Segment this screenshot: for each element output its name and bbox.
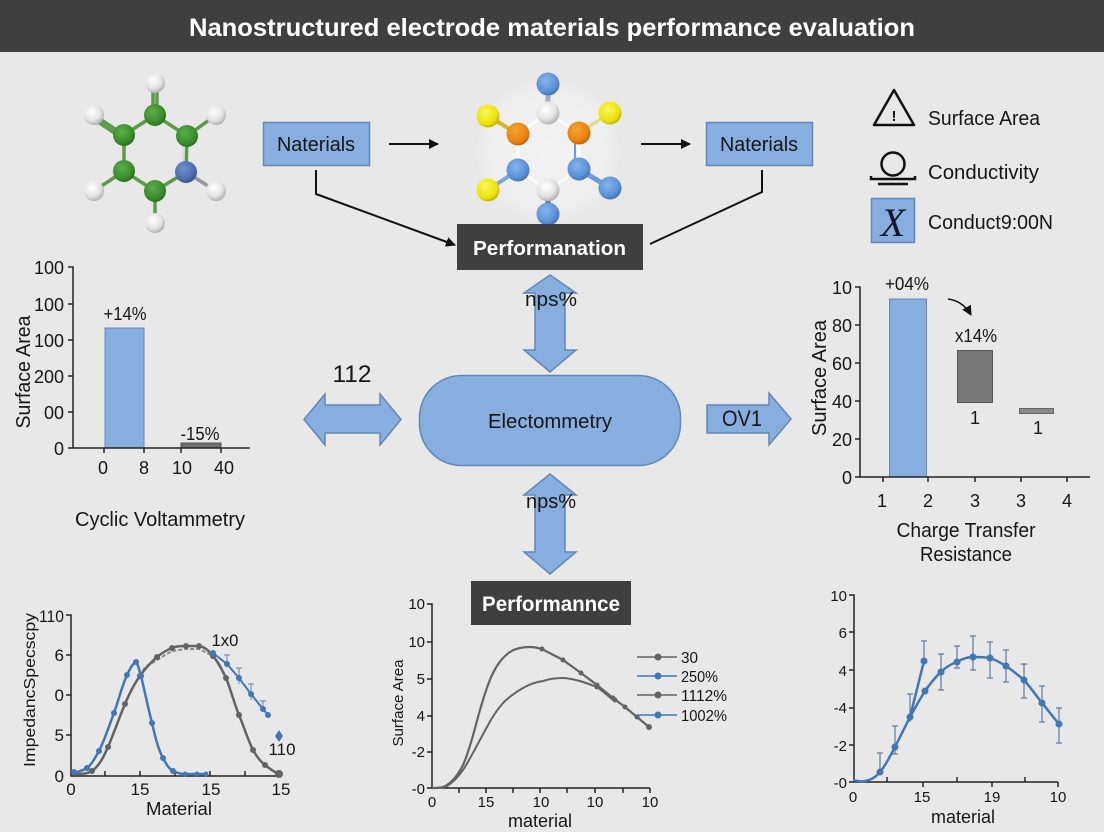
title: Nanostructured electrode materials performance evaluation — [189, 14, 915, 42]
box: Performannce: Performannce — [482, 593, 620, 616]
legend: 250% — [681, 669, 718, 686]
x axis labels: 15 — [202, 780, 220, 799]
legend label: conductivity: Conductivity — [928, 162, 1039, 184]
box: Performanation — [457, 224, 643, 270]
y axis labels: 6 — [55, 646, 64, 665]
chart: impedance spectroscopy — [22, 607, 296, 819]
x axis labels: 3 — [1016, 491, 1026, 511]
icon: circle on plate — [871, 152, 915, 184]
box: Naterials left — [264, 122, 370, 166]
arrow: molecule to right box — [641, 143, 690, 145]
bar values: -15% — [180, 424, 220, 444]
chart: charge transfer resistance bars — [809, 274, 1090, 566]
box: Naterials right: Naterials — [720, 134, 798, 156]
chart: blue curve with error bars — [830, 588, 1066, 827]
arrow: OV1: OV1 — [722, 406, 762, 431]
icon: green molecule — [84, 73, 226, 233]
y axis labels — [408, 596, 425, 798]
x axis title: Material — [146, 799, 212, 819]
icon: X box — [872, 198, 914, 245]
curve: grey — [72, 643, 283, 778]
legend label: conduct9:00N: Conduct9:00N — [928, 212, 1053, 234]
curve: lower — [432, 678, 613, 788]
x axis labels: 0 — [849, 789, 857, 806]
x axis labels: 4 — [1062, 491, 1072, 511]
data labels: 1x0 — [212, 631, 238, 650]
bar values: 1 — [970, 408, 980, 428]
bar values: +14% — [104, 304, 146, 324]
box: Naterials left: Naterials — [277, 134, 355, 156]
x axis labels: 0 — [428, 794, 436, 811]
y axis labels: -2 — [412, 744, 425, 761]
x axis labels: 0 — [98, 458, 108, 478]
x axis labels: 10 — [533, 794, 549, 811]
label: 112: 112 — [332, 361, 372, 388]
y axis labels: 10 — [832, 278, 852, 298]
x axis labels — [66, 780, 290, 799]
curve: blue — [853, 654, 1062, 781]
x axis labels: 15 — [914, 789, 930, 806]
box: Naterials right — [706, 122, 812, 166]
data labels — [212, 631, 296, 759]
title bar — [0, 0, 1104, 52]
y axis labels: 80 — [832, 316, 852, 336]
y axis labels: 0 — [55, 686, 64, 705]
curve: grey dashed — [140, 649, 213, 676]
y axis labels — [830, 588, 847, 792]
y axis labels: 6 — [839, 625, 847, 642]
y axis title: ImpedancSpecscpy — [22, 613, 39, 767]
y axis labels: 100 — [34, 331, 64, 351]
y axis labels: 20 — [832, 430, 852, 450]
arrow: curved — [948, 299, 971, 315]
y axis labels: 10 — [408, 634, 425, 651]
x axis labels: 2 — [923, 491, 933, 511]
arrow: vertical double bottom: nps% — [526, 491, 576, 513]
legend label: surface area: Surface Area — [928, 108, 1041, 130]
y axis labels: 0 — [55, 767, 64, 786]
box: Electommetry: Electommetry — [488, 411, 612, 433]
legend — [637, 650, 727, 725]
y axis labels: 200 — [34, 367, 64, 387]
y axis labels: 40 — [832, 392, 852, 412]
x axis labels: 10 — [1050, 789, 1066, 806]
y axis labels — [39, 607, 64, 786]
legend: 30 — [681, 650, 698, 667]
y axis labels: 4 — [417, 708, 425, 725]
x axis labels: 15 — [272, 780, 290, 799]
chart: surface area curves — [390, 596, 727, 831]
x axis labels: 40 — [214, 458, 234, 478]
icon: warning triangle: ! — [892, 108, 896, 125]
curve: upper — [432, 646, 652, 788]
legend: properties — [871, 90, 1053, 245]
curve: blue tail with error bars — [210, 650, 283, 742]
x axis labels: 0 — [66, 780, 76, 799]
x axis labels — [98, 458, 234, 478]
axes — [66, 615, 278, 776]
box: Performannce — [471, 581, 631, 625]
axes — [427, 604, 650, 793]
x axis labels: 3 — [970, 491, 980, 511]
arrow: vertical double top — [524, 275, 577, 372]
arrow: left box to Performanation — [316, 170, 455, 245]
error bars — [877, 636, 1062, 772]
y axis labels: 10 — [830, 588, 847, 605]
y axis labels: 0 — [54, 439, 64, 459]
curve: blue peak — [71, 659, 208, 776]
chart title — [896, 520, 1036, 566]
y axis labels: 5 — [417, 671, 425, 688]
x axis title: material — [508, 811, 572, 831]
bar values — [104, 304, 220, 444]
chart title: Resistance — [920, 544, 1012, 566]
icon: coloured molecule — [475, 72, 622, 226]
axes — [849, 595, 1058, 787]
arrow: horizontal double — [304, 394, 401, 445]
y axis labels: 4 — [839, 663, 847, 680]
y axis title: Surface Area — [390, 659, 407, 746]
icon: warning triangle — [874, 90, 914, 125]
box: Performanation: Performanation — [473, 238, 626, 260]
chart title: Charge Transfer — [896, 520, 1036, 542]
x axis title: material — [931, 807, 995, 827]
x axis labels — [877, 491, 1072, 511]
y axis labels: -4 — [834, 700, 847, 717]
legend: 1002% — [681, 708, 727, 725]
y axis labels: -2 — [834, 738, 847, 755]
x axis labels: 1 — [877, 491, 887, 511]
y axis labels — [832, 278, 852, 488]
y axis labels: 10 — [408, 596, 425, 613]
arrow: left box to molecule — [389, 143, 438, 145]
chart title: Cyclic Voltammetry — [75, 509, 245, 531]
y axis title: Surface Area — [13, 315, 35, 428]
arrow: vertical double bottom — [524, 474, 576, 574]
x axis labels: 15 — [478, 794, 494, 811]
x axis labels: 10 — [587, 794, 603, 811]
arrow: vertical double top: nps% — [525, 289, 577, 311]
bars — [105, 328, 221, 448]
bar values: x14% — [955, 326, 997, 346]
y axis labels: 100 — [34, 295, 64, 315]
box: Electommetry — [420, 376, 680, 466]
x axis labels — [849, 789, 1066, 806]
x axis labels: 19 — [984, 789, 1000, 806]
x axis labels: 10 — [642, 794, 658, 811]
x axis labels: 8 — [139, 458, 149, 478]
y axis labels — [34, 258, 64, 459]
bars — [890, 299, 1054, 477]
axes — [855, 287, 1090, 482]
icon: X box: X — [879, 200, 907, 245]
y axis title: Surface Area — [809, 319, 831, 436]
chart: cyclic voltammetry bars — [13, 258, 250, 531]
data labels: 110 — [268, 740, 296, 759]
y axis labels: 60 — [832, 354, 852, 374]
legend: 1112% — [681, 688, 727, 705]
x axis labels: 10 — [172, 458, 192, 478]
y axis labels: 00 — [44, 403, 64, 423]
y axis labels: 110 — [39, 607, 64, 626]
y axis labels: 0 — [842, 468, 852, 488]
bar values: 1 — [1033, 418, 1043, 438]
x axis labels: 15 — [131, 780, 149, 799]
y axis labels: -0 — [834, 775, 847, 792]
bar values: +04% — [885, 274, 929, 294]
y axis labels: -0 — [412, 781, 425, 798]
x axis labels — [428, 794, 658, 811]
bar values — [885, 274, 1043, 438]
y axis labels: 5 — [55, 726, 64, 745]
axes — [68, 267, 250, 453]
connector: right box to Performanation — [650, 170, 762, 244]
arrow: OV1 — [707, 393, 791, 445]
y axis labels: 100 — [34, 258, 64, 278]
